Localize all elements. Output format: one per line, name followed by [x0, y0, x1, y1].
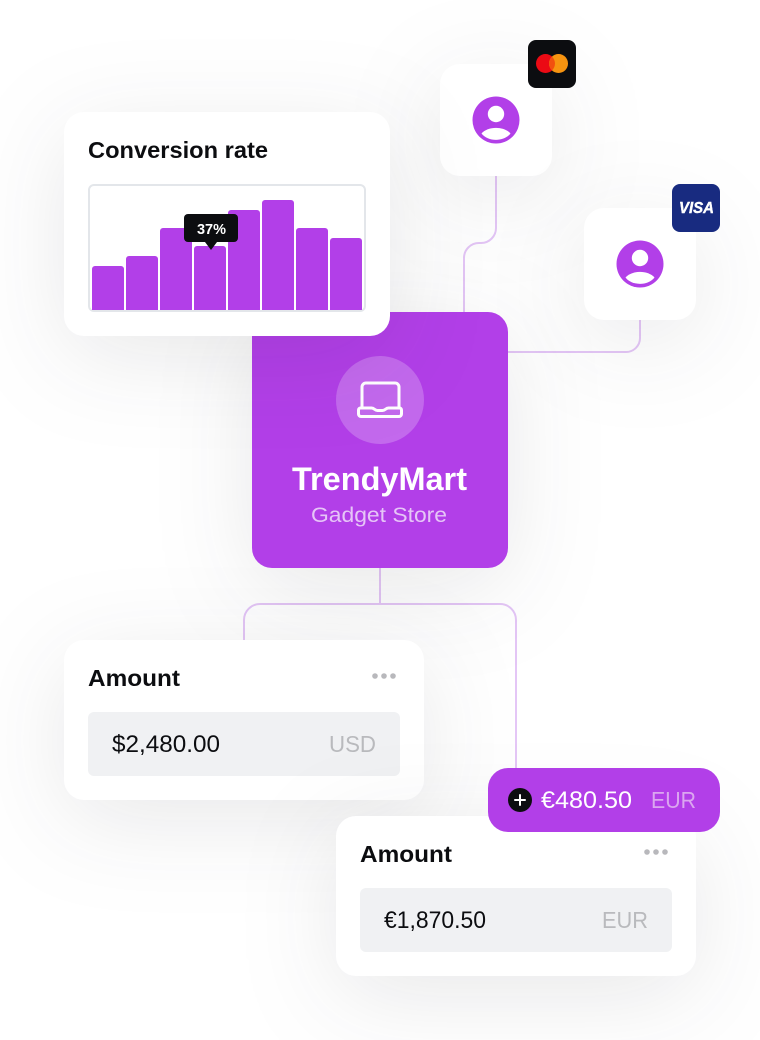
panel: EUR amount: [336, 816, 696, 976]
field: USD value: [88, 712, 400, 776]
connector: customer two to store: [508, 320, 640, 352]
heading: amount: Amount: [360, 841, 452, 867]
callout: added euro amount: EUR: [651, 787, 696, 813]
icon: customer avatar two: [616, 240, 664, 288]
field: USD value: USD: [329, 731, 376, 757]
field: USD value: $2,480.00: [112, 731, 220, 758]
panel: TrendyMart store: [252, 312, 508, 568]
heading: store name: TrendyMart: [292, 461, 467, 497]
field: EUR value: EUR: [602, 907, 648, 933]
tooltip: 37%: 37%: [197, 222, 226, 238]
icon: mastercard badge: [528, 40, 576, 88]
text: store type: Gadget Store: [311, 504, 447, 527]
heading: conversion rate: Conversion rate: [88, 137, 268, 163]
bar chart: [89, 185, 365, 311]
connector: store to amount cards: [244, 568, 516, 768]
icon: customer avatar one: [472, 96, 520, 144]
heading: amount: Amount: [88, 665, 180, 691]
connector: customer one to store: [464, 176, 496, 312]
tooltip: 37%: [184, 214, 238, 250]
callout: added euro amount: [488, 768, 720, 832]
field: EUR value: [360, 888, 672, 952]
panel: customer two: [584, 184, 720, 320]
panel: conversion rate: [64, 112, 390, 336]
icon: more menu: [644, 849, 668, 855]
icon: visa badge: VISA: [679, 200, 714, 217]
icon: more menu: [372, 673, 396, 679]
icon: plus: [508, 788, 532, 812]
icon: laptop: [336, 356, 424, 444]
panel: customer one: [440, 40, 576, 176]
field: EUR value: €1,870.50: [384, 907, 486, 934]
callout: added euro amount: €480.50: [541, 787, 632, 814]
panel: USD amount: [64, 640, 424, 800]
